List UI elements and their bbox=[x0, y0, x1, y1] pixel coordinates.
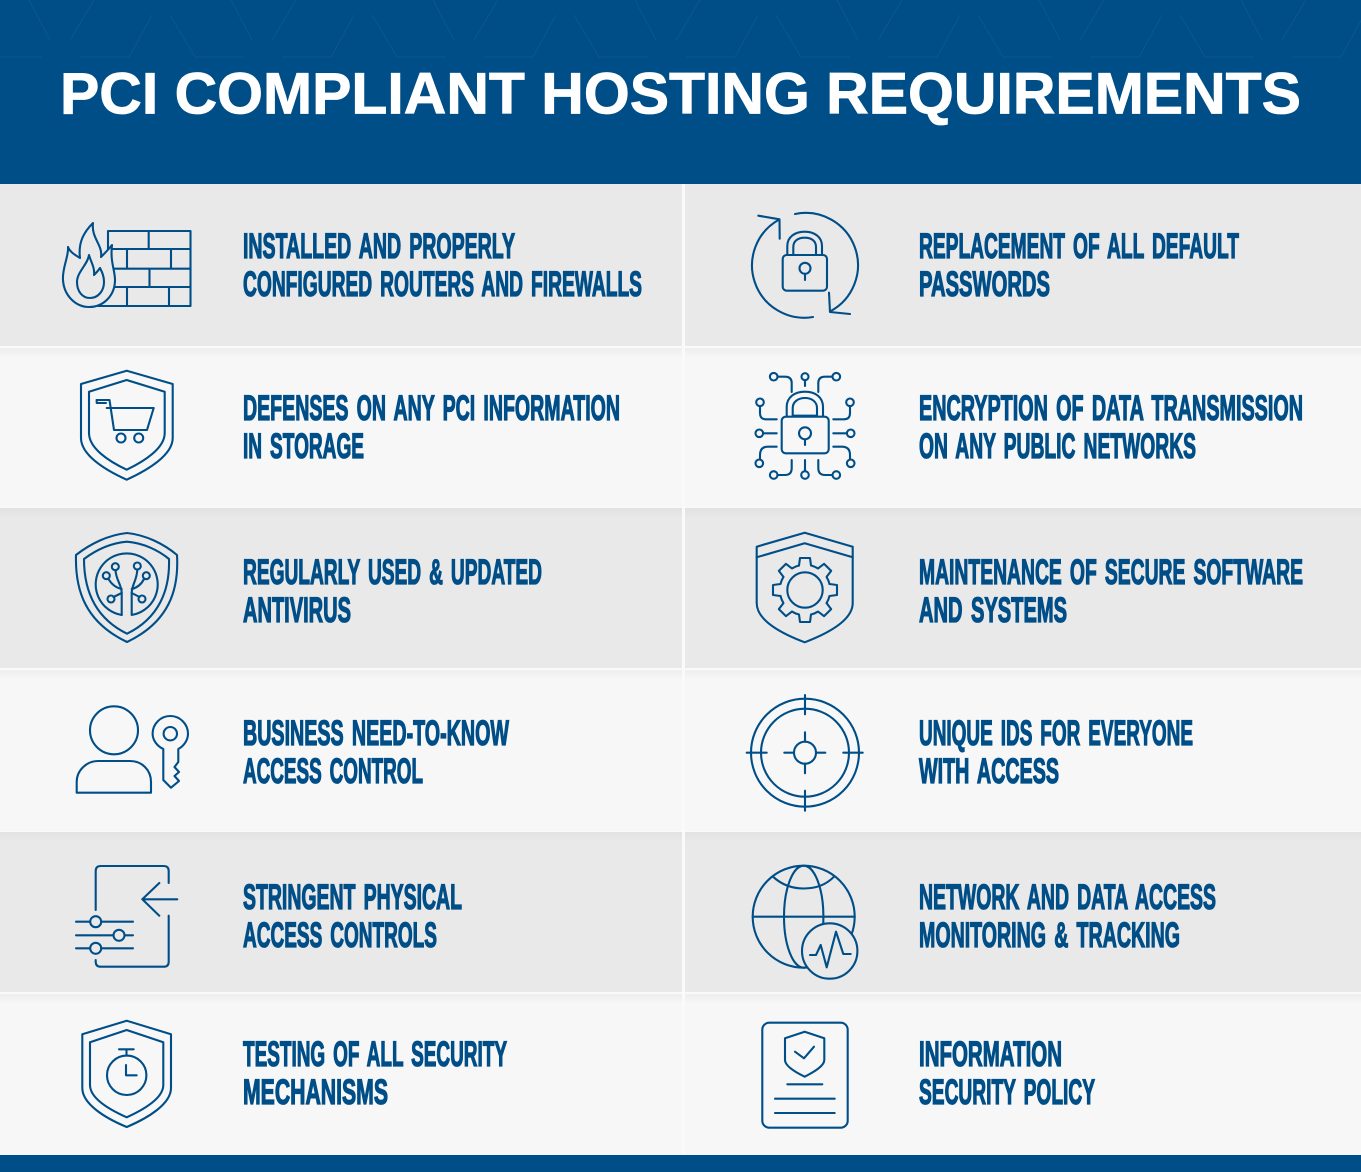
text: testing: TESTING OF ALL SECURITY bbox=[243, 1035, 507, 1074]
text: default passwords: PASSWORDS bbox=[919, 265, 1050, 304]
icon: lock with circuit traces bbox=[756, 373, 854, 479]
text: physical access: STRINGENT PHYSICAL bbox=[243, 878, 462, 917]
text: secure software: AND SYSTEMS bbox=[919, 591, 1067, 630]
panel: encryption bbox=[685, 348, 1361, 507]
footer band bbox=[0, 1155, 1361, 1172]
text: need-to-know: ACCESS CONTROL bbox=[243, 752, 423, 791]
text: monitoring bbox=[919, 878, 1216, 955]
panel: monitoring bbox=[685, 832, 1361, 992]
panel: antivirus bbox=[0, 508, 682, 668]
text: routers and firewalls bbox=[243, 227, 642, 304]
text: physical access bbox=[243, 878, 462, 955]
text: unique IDs bbox=[919, 714, 1193, 791]
text: antivirus: REGULARLY USED & UPDATED bbox=[243, 553, 542, 592]
icon: shield with shopping cart bbox=[81, 371, 173, 480]
icon: shield with stopwatch bbox=[82, 1021, 171, 1127]
panel: secure software bbox=[685, 508, 1361, 668]
panel: default passwords bbox=[685, 184, 1361, 346]
text: default passwords bbox=[919, 227, 1239, 304]
text: need-to-know: BUSINESS NEED-TO-KNOW bbox=[243, 714, 509, 753]
panel: unique IDs bbox=[685, 670, 1361, 831]
panel: defenses in storage bbox=[0, 348, 682, 507]
icon: brick wall with flame bbox=[63, 223, 190, 307]
icon: lock with refresh arrows bbox=[752, 213, 858, 318]
text: defenses in storage: IN STORAGE bbox=[243, 427, 364, 466]
panel: physical access bbox=[0, 832, 682, 992]
text: security policy: INFORMATION bbox=[919, 1035, 1062, 1074]
text: security policy: SECURITY POLICY bbox=[919, 1073, 1095, 1112]
text: routers and firewalls: CONFIGURED ROUTERS AND FIREWALLS bbox=[243, 265, 642, 304]
text: encryption bbox=[919, 389, 1303, 466]
icon: policy document with shield bbox=[762, 1023, 848, 1128]
panel: testing bbox=[0, 994, 682, 1155]
text: physical access: ACCESS CONTROLS bbox=[243, 916, 437, 955]
panel: security policy bbox=[685, 994, 1361, 1155]
header band bbox=[0, 0, 1361, 184]
icon: shield with circuit brain bbox=[76, 533, 177, 642]
panel: routers and firewalls bbox=[0, 184, 682, 346]
text: security policy bbox=[919, 1035, 1095, 1112]
icon: person and key bbox=[77, 706, 188, 793]
text: antivirus bbox=[243, 553, 542, 630]
text: testing: MECHANISMS bbox=[243, 1073, 388, 1112]
text: unique IDs: WITH ACCESS bbox=[919, 752, 1059, 791]
icon: globe with pulse bbox=[753, 866, 857, 979]
text: secure software bbox=[919, 553, 1303, 630]
icon: target crosshair bbox=[747, 695, 863, 811]
text: defenses in storage: DEFENSES ON ANY PCI INFORMATION bbox=[243, 389, 620, 428]
text: testing bbox=[243, 1035, 507, 1112]
title: PCI COMPLIANT HOSTING REQUIREMENTS bbox=[60, 62, 1301, 126]
icon: shield with gear bbox=[757, 533, 853, 642]
icon: door with arrow and sliders bbox=[76, 866, 177, 967]
text: routers and firewalls: INSTALLED AND PROPERLY bbox=[243, 227, 515, 266]
text: antivirus: ANTIVIRUS bbox=[243, 591, 351, 630]
text: defenses in storage bbox=[243, 389, 620, 466]
panel: need-to-know bbox=[0, 670, 682, 831]
text: need-to-know bbox=[243, 714, 509, 791]
